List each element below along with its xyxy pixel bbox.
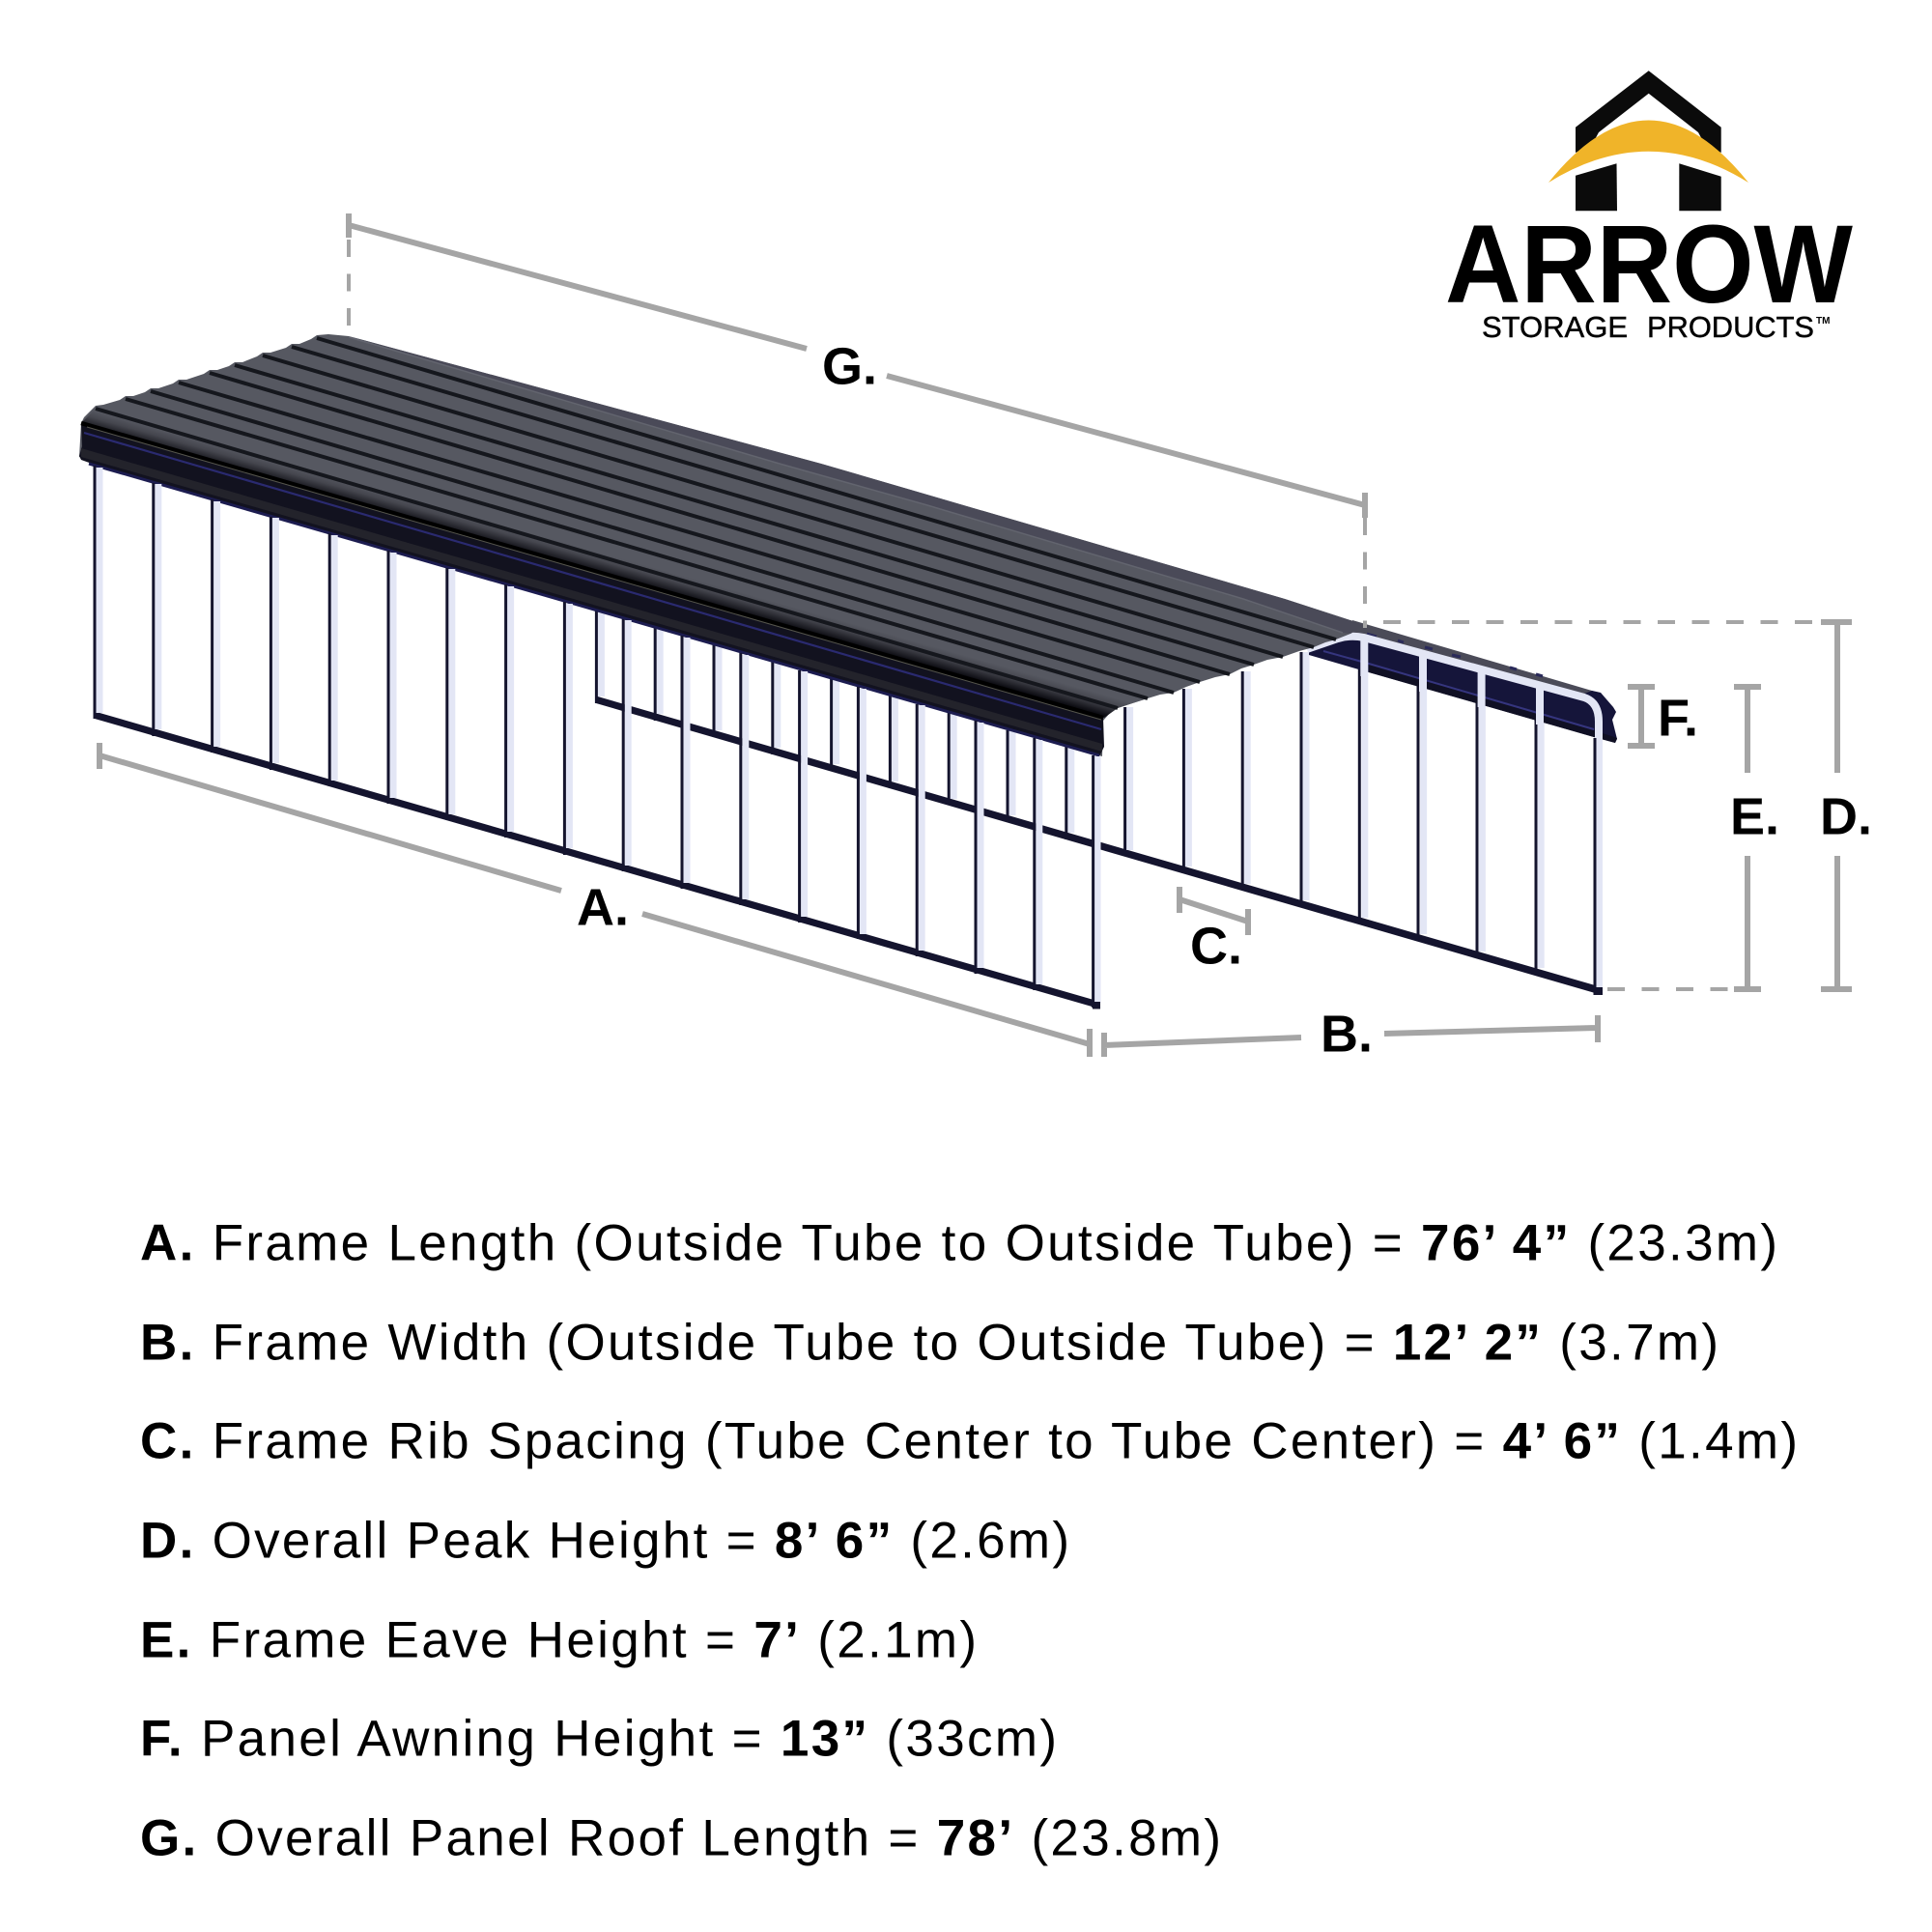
end of back rail	[1594, 987, 1603, 995]
back frame posts	[596, 611, 1541, 975]
awning blue line	[1323, 651, 1594, 729]
dimension G: G.	[822, 338, 877, 396]
dimension F: F.	[1658, 690, 1698, 748]
carport illustration	[79, 334, 1617, 1009]
back end arch	[1307, 637, 1599, 989]
awning roof sliver	[1352, 620, 1602, 703]
fascia lower band	[81, 448, 1102, 752]
spec F: F. Panel Awning Height = 13” (33cm)	[140, 1710, 1057, 1768]
dimension B	[1104, 1005, 1598, 1063]
logo yellow arc	[1548, 120, 1748, 183]
front frame posts	[95, 466, 1100, 1009]
front fascia	[79, 423, 1104, 756]
back posts over awning	[1364, 639, 1540, 724]
specification list	[140, 1215, 1798, 1866]
logo house walls	[1576, 163, 1617, 211]
logo	[1445, 71, 1853, 344]
spec E: E. Frame Eave Height = 7’ (2.1m)	[140, 1611, 977, 1669]
logo tagline: PRODUCTS	[1647, 310, 1814, 344]
logo tagline	[1482, 310, 1814, 344]
logo wordmark: ARROW	[1445, 203, 1853, 327]
roof ridge strip	[349, 336, 1365, 634]
roof panels	[79, 334, 1365, 756]
spec G: G. Overall Panel Roof Length = 78’ (23.8m)	[140, 1810, 1221, 1866]
dimension D	[1820, 622, 1872, 989]
spec A: A. Frame Length (Outside Tube to Outside Tube) = 76’ 4” (23.3m)	[140, 1215, 1777, 1271]
logo trademark: TM	[1816, 316, 1830, 327]
back frame rail	[596, 696, 1602, 995]
fascia blue line	[84, 433, 1101, 729]
dimension A: A.	[577, 879, 629, 937]
fascia navy edge	[89, 464, 1099, 755]
dimension E: E.	[1730, 788, 1779, 846]
spec B: B. Frame Width (Outside Tube to Outside Tube) = 12’ 2” (3.7m)	[140, 1314, 1719, 1372]
dimension A	[99, 743, 1090, 1057]
dimension E	[1730, 687, 1779, 989]
dimension G	[349, 213, 1365, 628]
logo house roof	[1576, 71, 1721, 153]
dashed guide lines	[1383, 622, 1821, 989]
dimension F	[1628, 687, 1698, 748]
back awning panel	[1309, 620, 1617, 743]
dimension D: D.	[1820, 788, 1872, 846]
spec D: D. Overall Peak Height = 8’ 6” (2.6m)	[140, 1513, 1069, 1569]
front frame rail	[95, 711, 1100, 1009]
dimension C: C.	[1190, 918, 1242, 976]
last back post dark edge	[1594, 738, 1596, 995]
dimension C	[1179, 887, 1248, 976]
awning lower band	[1369, 665, 1617, 743]
eave bend shading	[81, 399, 1148, 718]
corrugation ribs	[96, 338, 1336, 708]
dimension B: B.	[1321, 1005, 1373, 1063]
spec C: C. Frame Rib Spacing (Tube Center to Tube Center) = 4’ 6” (1.4m)	[140, 1412, 1798, 1470]
sliver marks	[1367, 634, 1543, 676]
logo tagline: STORAGE	[1482, 310, 1628, 344]
fascia top bead	[81, 423, 1103, 718]
awning navy underside	[1309, 638, 1617, 743]
